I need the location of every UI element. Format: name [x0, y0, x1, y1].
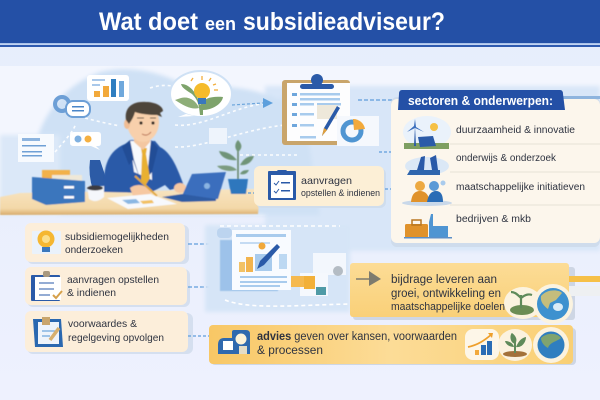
title word: een: een: [205, 14, 236, 34]
card text: voorwaardes &: [68, 318, 137, 330]
arrow: bulb to clipboard: [232, 98, 273, 108]
arrow: desk to application callout: [248, 190, 265, 197]
shirt: [130, 141, 152, 180]
panel: bijdrage leveren: [350, 263, 600, 324]
icon: growth chart: [465, 329, 499, 360]
title banner: [0, 0, 600, 47]
card text: [65, 231, 169, 256]
icon: small note: [209, 128, 227, 144]
arrow: conditions card to advice bar: [188, 335, 211, 337]
icon: community people: [402, 180, 452, 206]
icon: chart card: [87, 75, 129, 101]
panel text: maatschappelijke doelen: [391, 301, 505, 313]
icon: briefcase and factory: [404, 214, 452, 238]
hair: [126, 102, 163, 124]
icon: seedling: [504, 287, 542, 319]
icon: globe: [533, 284, 573, 324]
face: [127, 102, 159, 142]
eyes and smile: [137, 118, 156, 135]
arrow: callout to sector panel: [385, 185, 403, 193]
panel text: advies geven over kansen, voorwaarden: [257, 331, 457, 343]
panel: advies geven: [209, 325, 576, 365]
panel text: bijdrage leveren aan: [391, 274, 497, 286]
chair: [89, 160, 110, 190]
card text: onderzoeken: [65, 244, 123, 256]
file box: [32, 170, 85, 205]
icon: clipboard: [282, 74, 379, 146]
sector label: onderwijs & onderzoek: onderwijs & onderzoek: [456, 153, 557, 164]
card text: & indienen: [67, 287, 116, 299]
icon: wind turbine and solar: [403, 116, 451, 149]
dashed connectors in illustration: [55, 85, 300, 155]
icon: globe: [533, 327, 569, 363]
panel text: [391, 274, 505, 313]
icon: microscopes: [405, 155, 449, 175]
writing hand: [130, 185, 152, 197]
laptop: [162, 172, 226, 202]
icon: speech bubble with dots: [70, 132, 101, 150]
card text: regelgeving opvolgen: [68, 332, 164, 344]
icon: bulb on book: [32, 230, 61, 254]
card text: [67, 274, 159, 299]
panel: sectoren & onderwerpen: [391, 90, 600, 247]
suit jacket: [104, 140, 184, 193]
card text: subsidiemogelijkheden: [65, 231, 169, 243]
icon: clipboard checklist: [268, 170, 296, 200]
arrow: clipboard to sector panel: [358, 99, 400, 101]
background cloud illustration: [0, 69, 320, 215]
callout text: aanvragen: [301, 175, 352, 187]
illustration: adviser at desk: [0, 102, 260, 215]
title word: subsidieadviseur: subsidieadviseur?: [243, 8, 445, 36]
callout text: opstellen & indienen: [301, 188, 380, 199]
arrow: application card to document: [188, 282, 226, 293]
illustration: central document with pen: [205, 225, 350, 312]
panel heading: sectoren & onderwerpen:: [408, 93, 553, 108]
card: subsidiemogelijkheden onderzoeken: [25, 223, 189, 264]
arrow: grey right arrow: [356, 271, 381, 286]
callout: aanvragen opstellen & indienen: [254, 166, 386, 208]
panel text: & processen: [257, 345, 323, 357]
desk: [0, 189, 260, 215]
neck: [134, 128, 150, 150]
sector label: bedrijven & mkb: bedrijven & mkb: [456, 214, 531, 225]
panel text: groei, ontwikkeling en: [391, 288, 501, 300]
ear: [124, 119, 130, 129]
arrow: to sector row: [379, 149, 400, 155]
card: voorwaardes & regelgeving opvolgen: [25, 311, 193, 354]
callout text: [301, 175, 380, 199]
sector label: maatschappelijke initiatieven: maatschappelijke initiatieven: [456, 182, 585, 193]
card: aanvragen opstellen & indienen: [25, 267, 190, 307]
title: Wat doet: [99, 8, 199, 36]
lapels: [122, 140, 141, 182]
icon: light bulb with plant: [170, 71, 232, 117]
card text: [68, 318, 164, 344]
icon: plant in soil: [498, 329, 532, 361]
tie: [141, 148, 150, 186]
card text: aanvragen opstellen: [67, 274, 159, 286]
sector label: duurzaamheid & innovatie: duurzaamheid & innovatie: [456, 125, 575, 136]
icon: rules document with stamp: [33, 317, 63, 347]
papers: [107, 194, 177, 209]
icon: document card: [18, 134, 54, 162]
panel text: [257, 331, 457, 357]
arrow: research card to document: [188, 241, 222, 248]
left hand: [174, 183, 186, 193]
icon: checklist clipboard: [31, 271, 62, 301]
mug: [87, 186, 104, 201]
icon: gear and chat bubble: [55, 97, 90, 117]
icon: advice building: [218, 330, 250, 354]
potted plant: [217, 140, 254, 194]
